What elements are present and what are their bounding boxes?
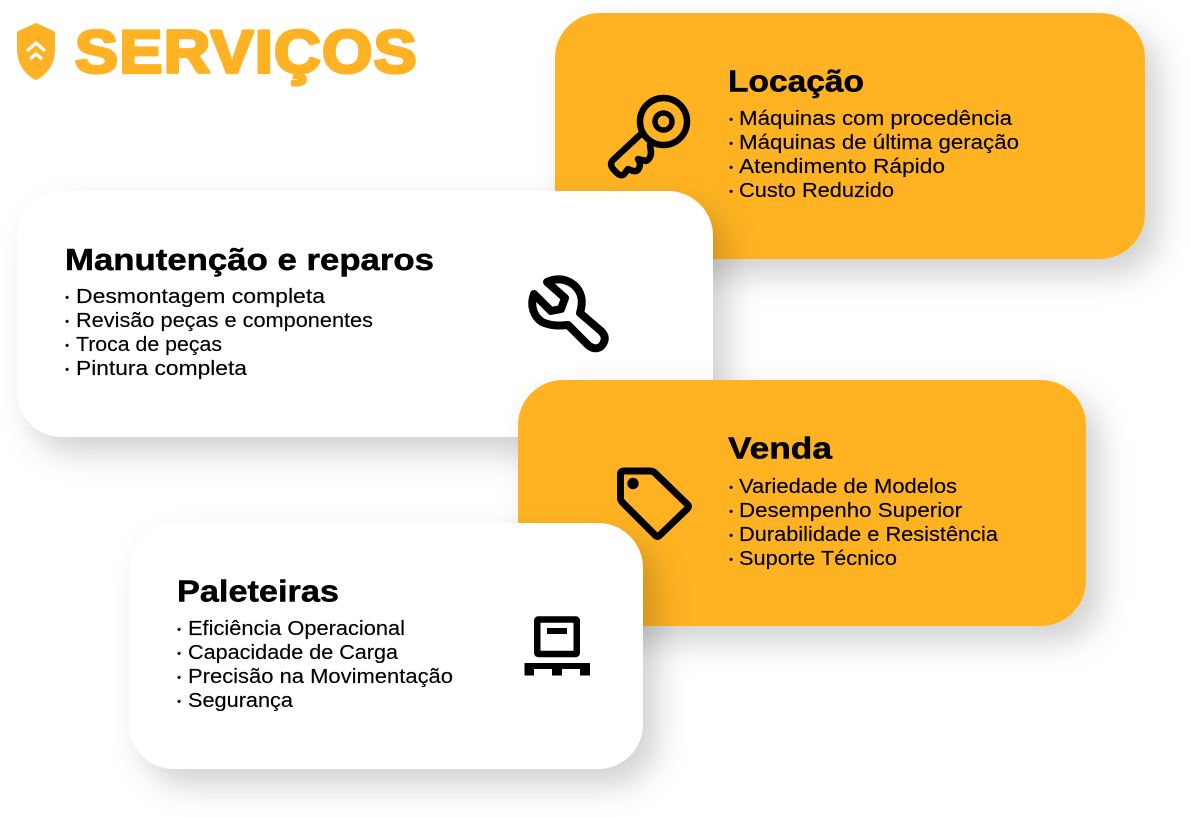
- list: Paleteiras items: •: [177, 622, 181, 636]
- icon: key: [611, 98, 687, 175]
- list: Locação items: Máquinas de última geração: [739, 131, 1019, 154]
- list: Locação items: •: [729, 136, 733, 150]
- list: Locação items: [729, 107, 1019, 202]
- list: Venda items: •: [729, 480, 733, 494]
- list: Paleteiras items: Capacidade de Carga: [188, 641, 399, 664]
- list: Venda items: Desempenho Superior: [739, 499, 962, 522]
- icon: price tag: [620, 471, 688, 536]
- heading: Locação: Locação: [728, 64, 864, 98]
- list: Manutenção items: Pintura completa: [76, 357, 248, 380]
- list: Manutenção items: •: [65, 290, 69, 304]
- panel: Paleteiras: [129, 523, 643, 769]
- list: Manutenção items: Desmontagem completa: [76, 285, 326, 308]
- list: Venda items: •: [729, 528, 733, 542]
- list: Venda items: [729, 475, 999, 570]
- list: Paleteiras items: •: [177, 670, 181, 684]
- list: Manutenção items: Revisão peças e componentes: [76, 309, 373, 332]
- list: Paleteiras items: •: [177, 646, 181, 660]
- list: Venda items: Suporte Técnico: [739, 547, 897, 570]
- list: Manutenção items: •: [65, 362, 69, 376]
- list: Manutenção items: •: [65, 314, 69, 328]
- list: Manutenção items: Troca de peças: [76, 333, 222, 356]
- heading: Paleteiras: Paleteiras: [177, 574, 339, 608]
- list: Locação items: •: [729, 184, 733, 198]
- icon: box on pallet: [524, 620, 590, 676]
- heading: SERVIÇOS: SERVIÇOS: [75, 18, 418, 86]
- icon: shield with chevrons: [18, 24, 54, 80]
- heading: Manutenção e reparos: Manutenção e reparos: [65, 242, 434, 277]
- list: Paleteiras items: Segurança: [188, 689, 294, 712]
- list: Locação items: Custo Reduzido: [739, 179, 894, 202]
- list: Locação items: Atendimento Rápido: [739, 155, 945, 178]
- list: Paleteiras items: •: [177, 694, 181, 708]
- panel: Manutenção e reparos: [17, 191, 713, 437]
- list: Paleteiras items: [177, 617, 453, 712]
- panel: Locação: [555, 13, 1145, 259]
- list: Paleteiras items: Eficiência Operacional: [188, 617, 405, 640]
- list: Locação items: •: [729, 160, 733, 174]
- list: Locação items: Máquinas com procedência: [739, 107, 1013, 130]
- heading: Venda: Venda: [728, 430, 833, 466]
- list: Manutenção items: [65, 285, 373, 380]
- list: Venda items: •: [729, 504, 733, 518]
- panel: Venda: [518, 380, 1086, 626]
- list: Manutenção items: •: [65, 338, 69, 352]
- list: Paleteiras items: Precisão na Movimentação: [188, 665, 453, 688]
- icon: wrench: [532, 279, 605, 348]
- list: Venda items: Variedade de Modelos: [739, 475, 957, 498]
- list: Locação items: •: [729, 112, 733, 126]
- title: Serviços with shield logo: [18, 18, 418, 86]
- list: Venda items: Durabilidade e Resistência: [739, 523, 999, 546]
- list: Venda items: •: [729, 552, 733, 566]
